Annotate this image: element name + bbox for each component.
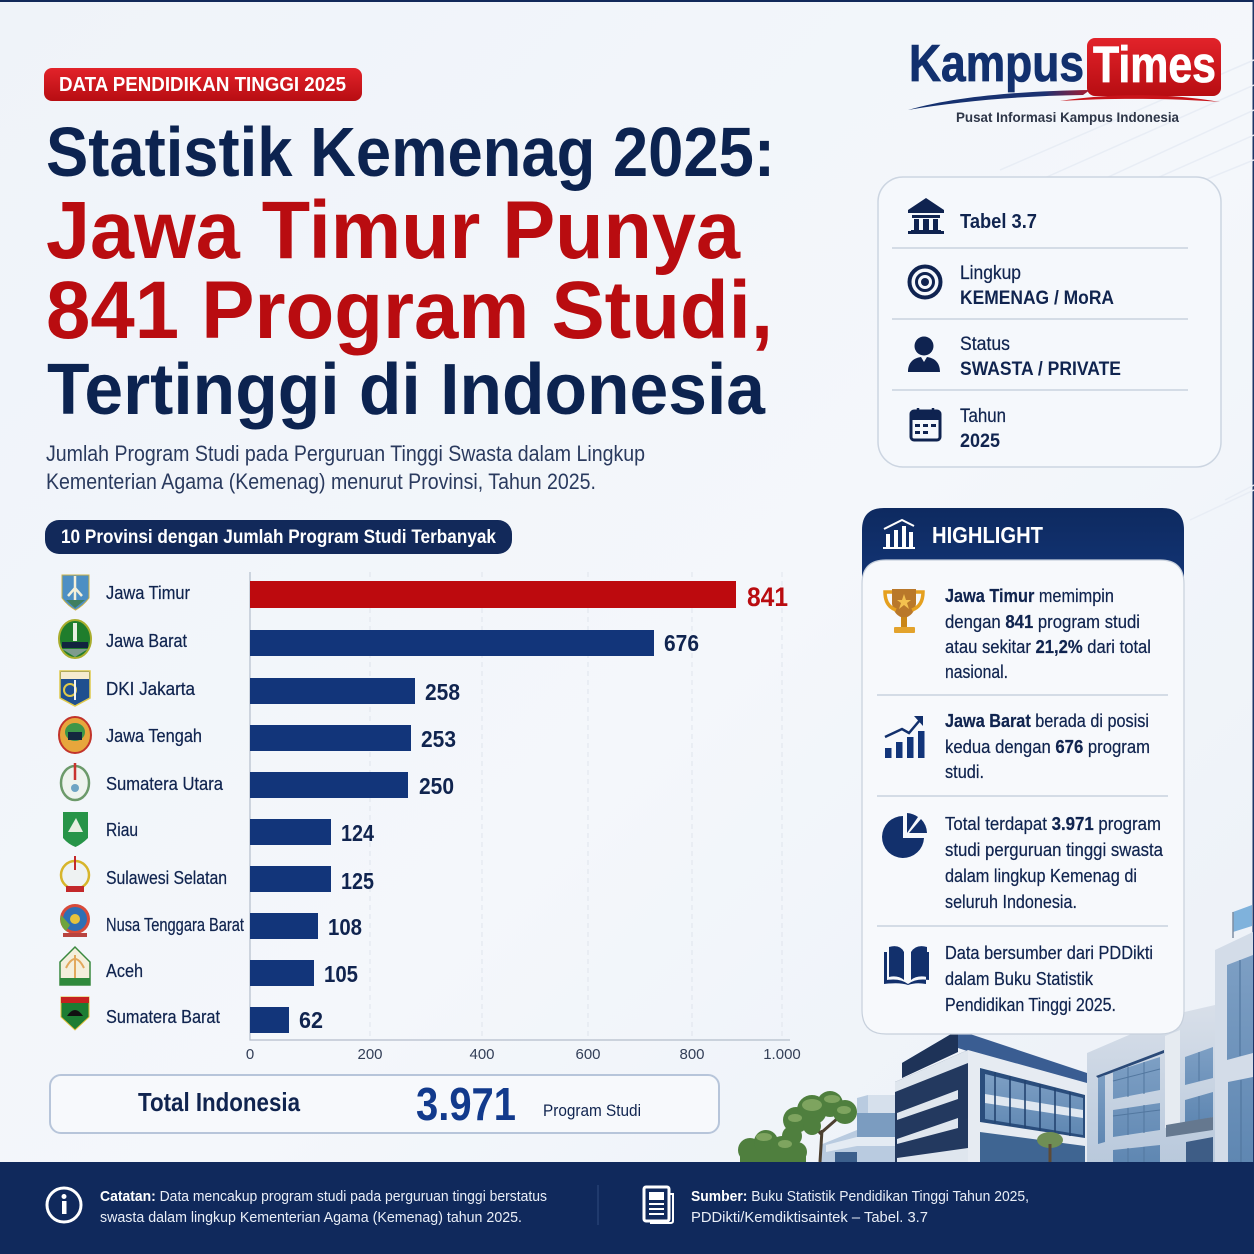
province labels: Sulawesi Selatan bbox=[106, 868, 227, 888]
province labels bbox=[106, 583, 244, 1027]
highlight header: HIGHLIGHT bbox=[932, 522, 1043, 548]
bar values: 676 bbox=[664, 630, 699, 656]
bar chart bbox=[59, 572, 801, 1063]
dark building bbox=[902, 1030, 1087, 1090]
note text: swasta dalam lingkup Kementerian Agama (Kemenag) tahun 2025. bbox=[100, 1209, 522, 1226]
chart heading pill: 10 Provinsi dengan Jumlah Program Studi Terbanyak bbox=[61, 527, 496, 548]
icon: person bbox=[908, 336, 940, 372]
text: highlight 4: Pendidikan Tinggi 2025. bbox=[945, 995, 1116, 1015]
note text bbox=[100, 1188, 547, 1226]
text: highlight 1: dengan 841 program studi bbox=[945, 612, 1140, 632]
text: highlight 1: Jawa Timur memimpin bbox=[945, 586, 1114, 606]
title bbox=[46, 113, 775, 430]
crest: Jawa Tengah bbox=[59, 717, 91, 753]
text: highlight 2 bbox=[945, 711, 1150, 782]
axis labels bbox=[246, 1046, 801, 1063]
bar values bbox=[299, 582, 788, 1033]
total indonesia box: Program Studi bbox=[543, 1101, 641, 1120]
axis labels: 800 bbox=[679, 1046, 705, 1063]
subtitle text: Jumlah Program Studi pada Perguruan Tinggi Swasta dalam Lingkup bbox=[46, 441, 645, 466]
chart heading pill bbox=[45, 520, 512, 554]
province labels: Aceh bbox=[106, 961, 143, 981]
logo: Kampus Times bbox=[908, 35, 1221, 125]
label: lingkup: KEMENAG / MoRA bbox=[960, 288, 1114, 309]
axis labels: 200 bbox=[357, 1046, 383, 1063]
source text: Sumber: Buku Statistik Pendidikan Tinggi Tahun 2025, bbox=[691, 1188, 1029, 1205]
title: Statistik Kemenag 2025: bbox=[46, 113, 775, 191]
text: highlight 3: dalam lingkup Kemenag di bbox=[945, 866, 1137, 886]
crest: Sumatera Utara bbox=[61, 763, 89, 800]
source text bbox=[691, 1188, 1029, 1226]
source text: PDDikti/Kemdiktisaintek – Tabel. 3.7 bbox=[691, 1209, 928, 1226]
crest: Aceh bbox=[60, 947, 90, 985]
illustration: campus buildings bbox=[738, 905, 1253, 1162]
crest: Jawa Timur bbox=[62, 575, 89, 610]
text: highlight 2: studi. bbox=[945, 762, 984, 782]
icon: trophy bbox=[885, 589, 923, 633]
label: tabel: Tabel 3.7 bbox=[960, 211, 1037, 233]
highlight header bbox=[862, 508, 1184, 580]
right wing bbox=[1087, 1005, 1215, 1162]
highlight card body bbox=[862, 560, 1184, 1034]
crest: Sumatera Barat bbox=[61, 997, 89, 1030]
label: lingkup: Lingkup bbox=[960, 263, 1021, 284]
province labels: Sumatera Utara bbox=[106, 774, 224, 794]
province labels: Nusa Tenggara Barat bbox=[106, 915, 244, 935]
text: highlight 3: studi perguruan tinggi swasta bbox=[945, 840, 1164, 860]
crest: Riau bbox=[63, 812, 88, 847]
icon: open book bbox=[884, 946, 929, 985]
bar values: 841 bbox=[747, 582, 788, 612]
subtitle text bbox=[46, 441, 645, 494]
icon: pie chart bbox=[882, 813, 927, 858]
title: Jawa Timur Punya bbox=[46, 185, 741, 276]
label: status: SWASTA / PRIVATE bbox=[960, 359, 1121, 380]
logo: Kampus Times: Kampus bbox=[909, 35, 1084, 93]
bar values: 250 bbox=[419, 773, 454, 799]
label: lingkup bbox=[960, 263, 1114, 309]
bar values: 258 bbox=[425, 679, 460, 705]
icon: calendar bbox=[911, 408, 940, 440]
text: highlight 1: atau sekitar 21,2% dari total bbox=[945, 637, 1151, 657]
bar values: 125 bbox=[341, 868, 374, 894]
province labels: Sumatera Barat bbox=[106, 1007, 220, 1027]
text: highlight 1: nasional. bbox=[945, 662, 1008, 682]
icon: document bbox=[644, 1187, 673, 1223]
text: highlight 2: kedua dengan 676 program bbox=[945, 737, 1150, 757]
text: highlight 4: dalam Buku Statistik bbox=[945, 969, 1094, 989]
badge: data pendidikan tinggi: DATA PENDIDIKAN TINGGI 2025 bbox=[59, 74, 346, 96]
badge: data pendidikan tinggi bbox=[44, 68, 362, 101]
text: highlight 1 bbox=[945, 586, 1151, 682]
text: highlight 4 bbox=[945, 943, 1153, 1015]
title: 841 Program Studi, bbox=[46, 265, 773, 356]
label: status bbox=[960, 334, 1121, 380]
bar values: 108 bbox=[328, 914, 362, 940]
total indonesia box: Total Indonesia bbox=[138, 1087, 300, 1117]
bar values: 62 bbox=[299, 1007, 323, 1033]
icon: institution bbox=[908, 198, 944, 234]
label: tahun: Tahun bbox=[960, 406, 1006, 427]
province labels: Jawa Tengah bbox=[106, 726, 202, 746]
bars bbox=[250, 581, 736, 1033]
text: highlight 2: Jawa Barat berada di posisi bbox=[945, 711, 1149, 731]
label: status: Status bbox=[960, 334, 1010, 355]
subtitle text: Kementerian Agama (Kemenag) menurut Provinsi, Tahun 2025. bbox=[46, 469, 596, 494]
bar values: 105 bbox=[324, 961, 358, 987]
text: highlight 3: Total terdapat 3.971 program bbox=[945, 814, 1161, 834]
icon: info bbox=[47, 1188, 81, 1222]
crest: Jawa Barat bbox=[59, 620, 91, 658]
panel: highlight bbox=[862, 508, 1184, 1034]
trees bbox=[808, 1118, 838, 1162]
crest: Sulawesi Selatan bbox=[61, 856, 89, 892]
icon: target bbox=[910, 266, 940, 298]
text: highlight 4: Data bersumber dari PDDikti bbox=[945, 943, 1153, 963]
tall tower bbox=[1215, 932, 1253, 1162]
text: highlight 3 bbox=[945, 814, 1164, 912]
back building bbox=[820, 1095, 895, 1162]
province crests bbox=[59, 575, 91, 1030]
axis labels: 400 bbox=[469, 1046, 495, 1063]
province labels: Jawa Barat bbox=[106, 631, 187, 651]
axis labels: 600 bbox=[575, 1046, 601, 1063]
total indonesia box bbox=[50, 1075, 719, 1133]
label: tahun: 2025 bbox=[960, 431, 1000, 452]
crest: DKI Jakarta bbox=[60, 671, 90, 706]
footer band bbox=[0, 1162, 1254, 1254]
axis labels: 0 bbox=[246, 1046, 254, 1063]
crest: Nusa Tenggara Barat bbox=[60, 904, 90, 937]
note text: Catatan: Data mencakup program studi pada perguruan tinggi berstatus bbox=[100, 1188, 547, 1205]
province labels: DKI Jakarta bbox=[106, 679, 196, 699]
bar values: 253 bbox=[421, 726, 456, 752]
panel: table info bbox=[878, 177, 1221, 467]
province labels: Jawa Timur bbox=[106, 583, 190, 603]
logo: Kampus Times: Times bbox=[1093, 36, 1216, 93]
text: highlight 3: seluruh Indonesia. bbox=[945, 892, 1077, 912]
title: Tertinggi di Indonesia bbox=[47, 350, 766, 430]
icon: growth chart bbox=[885, 716, 924, 758]
axis labels: 1.000 bbox=[763, 1046, 801, 1063]
total indonesia box: 3.971 bbox=[416, 1078, 516, 1130]
logo: Kampus Times: Pusat Informasi Kampus Indonesia bbox=[956, 109, 1179, 125]
province labels: Riau bbox=[106, 820, 138, 840]
bar values: 124 bbox=[341, 820, 374, 846]
label: tahun bbox=[960, 406, 1006, 452]
